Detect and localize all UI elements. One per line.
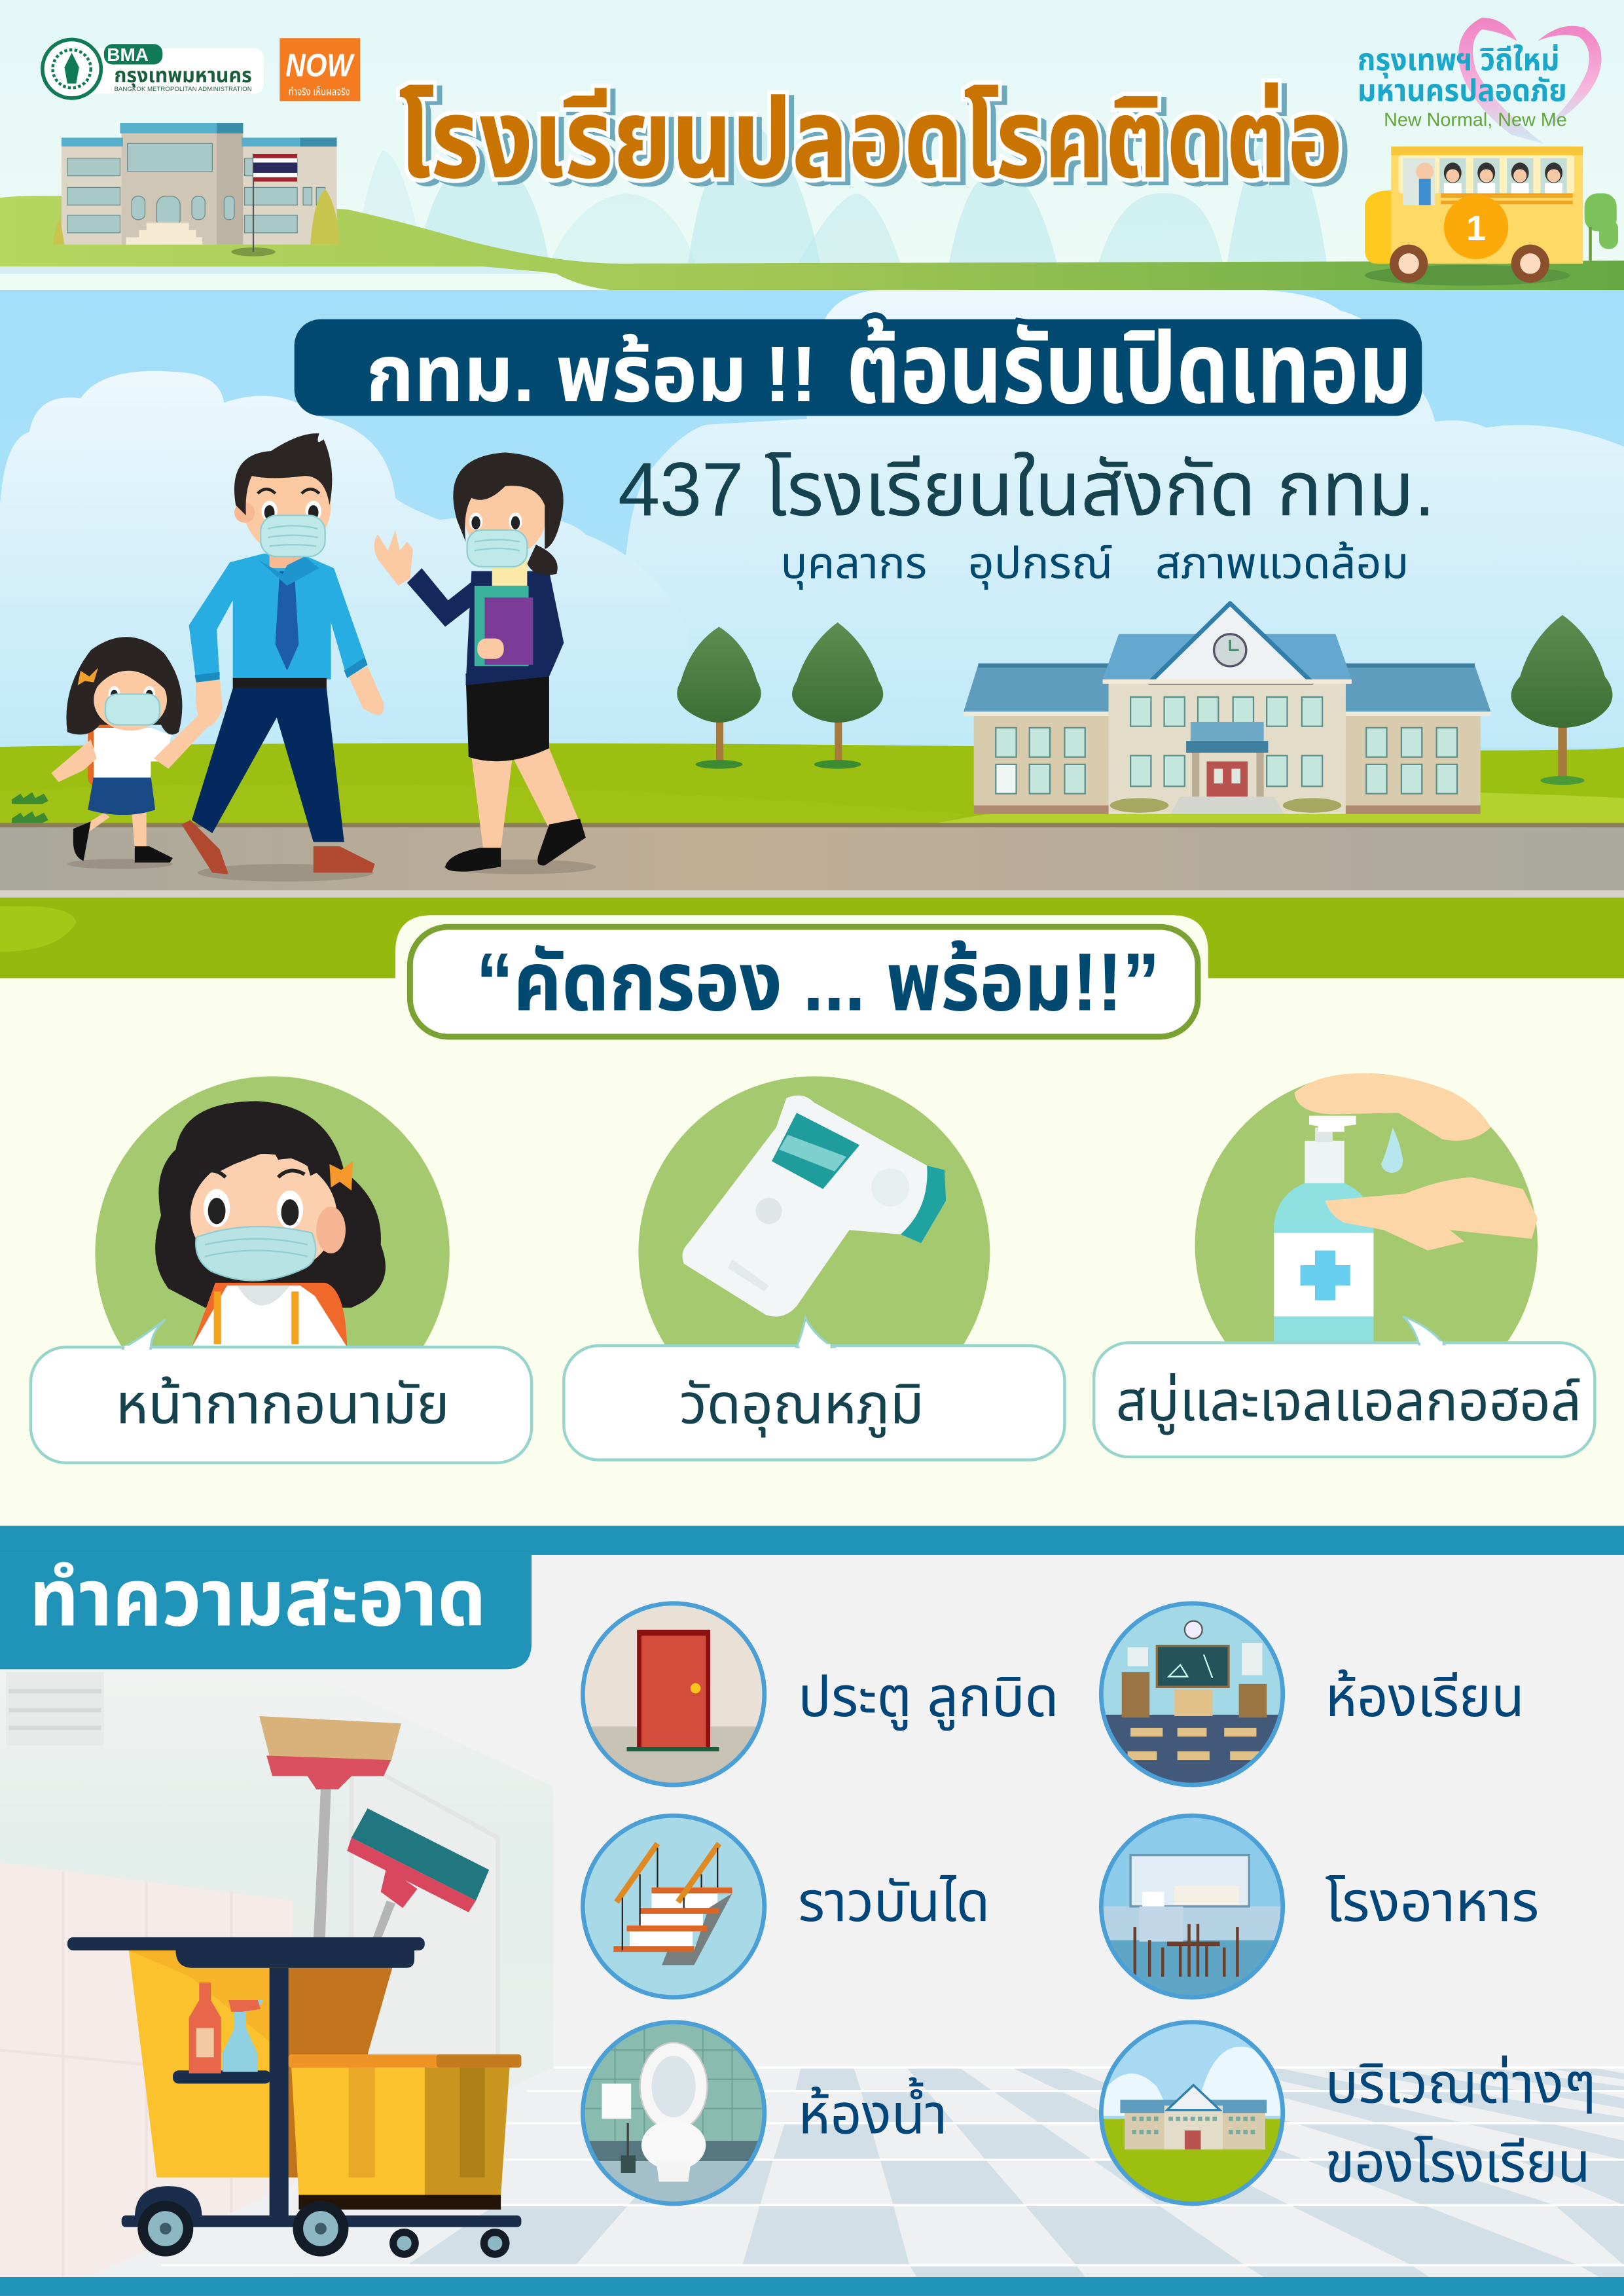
speech bubble	[31, 1319, 532, 1463]
bus passengers	[1403, 158, 1567, 205]
yellow bucket	[289, 2054, 521, 2210]
card: temperature	[564, 1076, 1064, 1460]
heading: screening ready	[395, 915, 1208, 1037]
title: โรงเรียนปลอดโรคติดต่อ	[399, 77, 1343, 202]
tree 2	[792, 622, 883, 769]
item: restroom: ห้องน้ำ	[798, 2077, 947, 2146]
sub heading: three aspects: บุคลากร	[780, 539, 927, 590]
speech bubble: สบู่และเจลแอลกอฮอล์	[1116, 1371, 1581, 1435]
floor tiles	[88, 2068, 1624, 2277]
icon: classroom	[1101, 1604, 1283, 1788]
green hill and ground	[0, 196, 1624, 291]
background wall	[0, 1669, 554, 2277]
logo: BMA: BANGKOK METROPOLITAN ADMINISTRATION	[114, 86, 252, 92]
illustration: school building	[964, 603, 1490, 814]
icon: toilet	[583, 2022, 765, 2205]
banner text left: กทม. พร้อม	[366, 330, 747, 418]
speech bubble: หน้ากากอนามัย	[116, 1374, 450, 1436]
illustration: girl in mask	[51, 637, 215, 869]
tree 3	[1511, 615, 1612, 785]
item: canteen	[1101, 1816, 1539, 1999]
headline banner	[295, 313, 1422, 424]
title: โรงเรียนปลอดโรคติดต่อ	[404, 81, 1348, 206]
item: stair rail: ราวบันได	[798, 1871, 990, 1933]
illustration: woman in mask	[374, 452, 596, 874]
item: canteen: โรงอาหาร	[1326, 1871, 1539, 1933]
panel: screening	[0, 915, 1624, 1526]
logo: Bangkok new normal: มหานครปลอดภัย	[1358, 73, 1567, 107]
item: stair rail	[583, 1816, 990, 1998]
item: door and knob: ประตู ลูกบิด	[798, 1666, 1058, 1731]
speech bubble: วัดอุณหภูมิ	[679, 1374, 924, 1439]
tree 1	[677, 627, 761, 769]
item: restroom	[583, 2022, 947, 2205]
item: door and knob	[583, 1604, 1058, 1788]
broom	[259, 1716, 401, 1940]
panel: grass and road	[0, 743, 1624, 978]
icon: school grounds	[1101, 2022, 1283, 2206]
books	[475, 586, 533, 666]
panel: cleaning	[0, 1526, 1624, 2296]
item: classroom: ห้องเรียน	[1326, 1666, 1525, 1729]
logo: NOW: NOW	[285, 47, 355, 83]
man's mask	[261, 516, 325, 556]
school windows	[996, 697, 1457, 794]
illustration: header school building	[53, 123, 340, 257]
card: soap and gel	[1094, 1073, 1595, 1457]
logo: NOW	[280, 38, 360, 101]
header decorative fountain arches	[352, 123, 1327, 264]
sub heading: three aspects: สภาพแวดล้อม	[1155, 539, 1409, 588]
illustration: cleaning cart	[67, 1716, 521, 2258]
panel: header	[0, 0, 1624, 293]
heading tab: ทำความสะอาด	[29, 1554, 486, 1642]
cleaning bottles	[189, 1982, 264, 2073]
pale band under the hill	[0, 266, 549, 274]
heart outline	[1458, 18, 1602, 143]
sub heading: 437 schools: 437 โรงเรียนในสังกัด กทม.	[618, 447, 1435, 532]
heading tab	[0, 1554, 532, 1669]
illustration: man in mask	[181, 433, 384, 882]
woman's mask	[467, 530, 527, 567]
illustration: school bus	[1365, 147, 1618, 285]
sub heading: three aspects	[780, 539, 1409, 590]
logo: BMA	[43, 39, 264, 98]
wheels	[137, 2201, 510, 2258]
icon: girl with mask	[155, 1101, 386, 1347]
illustration: school bus: 1	[1466, 209, 1486, 248]
logo: Bangkok new normal: กรุงเทพฯ วิถีใหม่	[1358, 42, 1560, 78]
heading: screening ready: “คัดกรอง ... พร้อม!!”	[476, 937, 1160, 1028]
speech bubble	[564, 1318, 1064, 1460]
item: school grounds: ของโรงเรียน	[1326, 2132, 1591, 2194]
logo: NOW: ทำจริง เห็นผลจริง	[289, 86, 350, 98]
banner exclamation: !!	[765, 330, 817, 418]
banner text right: ต้อนรับเปิดเทอม	[846, 313, 1412, 424]
item: school grounds: บริเวณต่างๆ	[1326, 2053, 1596, 2115]
icon: hand gel bottle	[1274, 1073, 1538, 1344]
icon: infrared thermometer	[683, 1096, 946, 1317]
item: classroom	[1101, 1604, 1525, 1788]
item: school grounds	[1101, 2022, 1596, 2206]
panel: sky and school scene	[0, 290, 1624, 759]
card: face mask	[31, 1076, 532, 1463]
flag and pole	[231, 154, 297, 257]
icon: door	[583, 1604, 765, 1788]
logo: Bangkok new normal: New Normal, New Me	[1384, 109, 1567, 130]
mop	[347, 1808, 489, 1940]
logo: BMA: กรุงเทพมหานคร	[114, 63, 252, 87]
icon: canteen	[1101, 1816, 1283, 1999]
logo: BMA: BMA	[107, 45, 149, 65]
speech bubble	[1094, 1316, 1595, 1457]
girl's mask	[105, 694, 160, 725]
logo: Bangkok new normal	[1358, 18, 1602, 143]
sub heading: three aspects: อุปกรณ์	[968, 539, 1113, 590]
icon: stairs	[583, 1816, 765, 1998]
clouds	[0, 290, 1624, 747]
